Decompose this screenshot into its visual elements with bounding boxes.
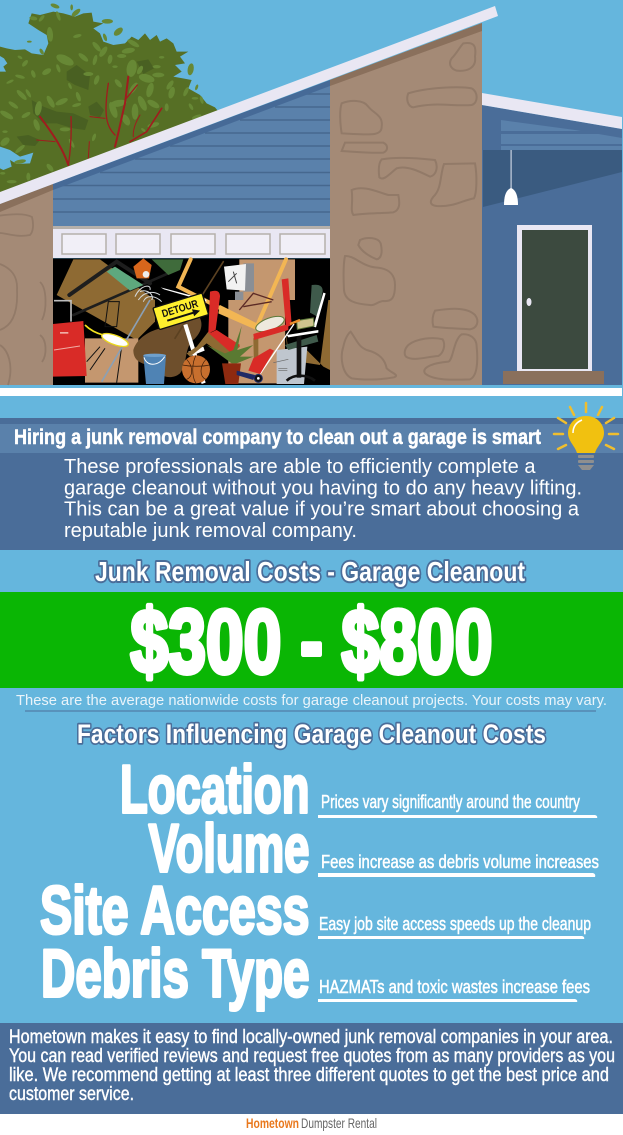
footer strip with logo <box>0 1114 623 1135</box>
factor: volume <box>148 810 599 886</box>
ground strip <box>0 388 622 396</box>
footer strip with logo: Hometown <box>246 1115 299 1131</box>
panel: closing text: customer service. <box>9 1084 134 1105</box>
blue siding on the garage wall <box>53 80 330 226</box>
intro text: reputable junk removal company. <box>64 519 357 542</box>
heading: factors: Factors Influencing Garage Cleanout Costs <box>77 719 546 749</box>
panel: price range: $300 - $800 <box>130 592 492 692</box>
tree behind the roof <box>0 3 220 200</box>
garage door header with windows <box>53 226 330 258</box>
illustration: house with a garage full of junk <box>0 3 622 396</box>
heading: junk removal costs: Junk Removal Costs - Garage Cleanout <box>95 556 525 587</box>
main sloped roof <box>0 6 498 204</box>
detour sign <box>153 293 209 330</box>
factor: volume: Volume <box>148 810 310 886</box>
intro text: These professionals are able to efficiently complete a <box>64 455 536 478</box>
panel: intro <box>0 403 623 550</box>
pendant lamp <box>504 150 518 205</box>
door step <box>503 371 604 384</box>
right house wing <box>482 93 622 385</box>
icon: light bulb <box>554 403 618 470</box>
factor: location: Location <box>120 752 310 828</box>
junk pile inside the garage <box>53 258 331 385</box>
intro text <box>64 455 582 542</box>
detour sign: DETOUR <box>160 298 200 320</box>
left stone wall <box>0 184 53 385</box>
factor: site access: Site Access <box>40 872 310 948</box>
front door <box>517 225 592 371</box>
footer strip with logo: Dumpster Rental <box>301 1115 377 1131</box>
central stone wall <box>330 23 482 385</box>
factor: site access <box>40 872 591 948</box>
factor: location <box>120 752 597 828</box>
intro text: This can be a great value if you’re smart about choosing a <box>64 498 580 520</box>
factor: debris type <box>41 936 590 1012</box>
note on average costs: These are the average nationwide costs for garage cleanout projects. Your costs may vary. <box>16 692 607 709</box>
factor: debris type: Debris Type <box>41 936 310 1012</box>
panel: closing text <box>0 1023 623 1114</box>
intro text: garage cleanout without you having to do any heavy lifting. <box>64 476 582 500</box>
